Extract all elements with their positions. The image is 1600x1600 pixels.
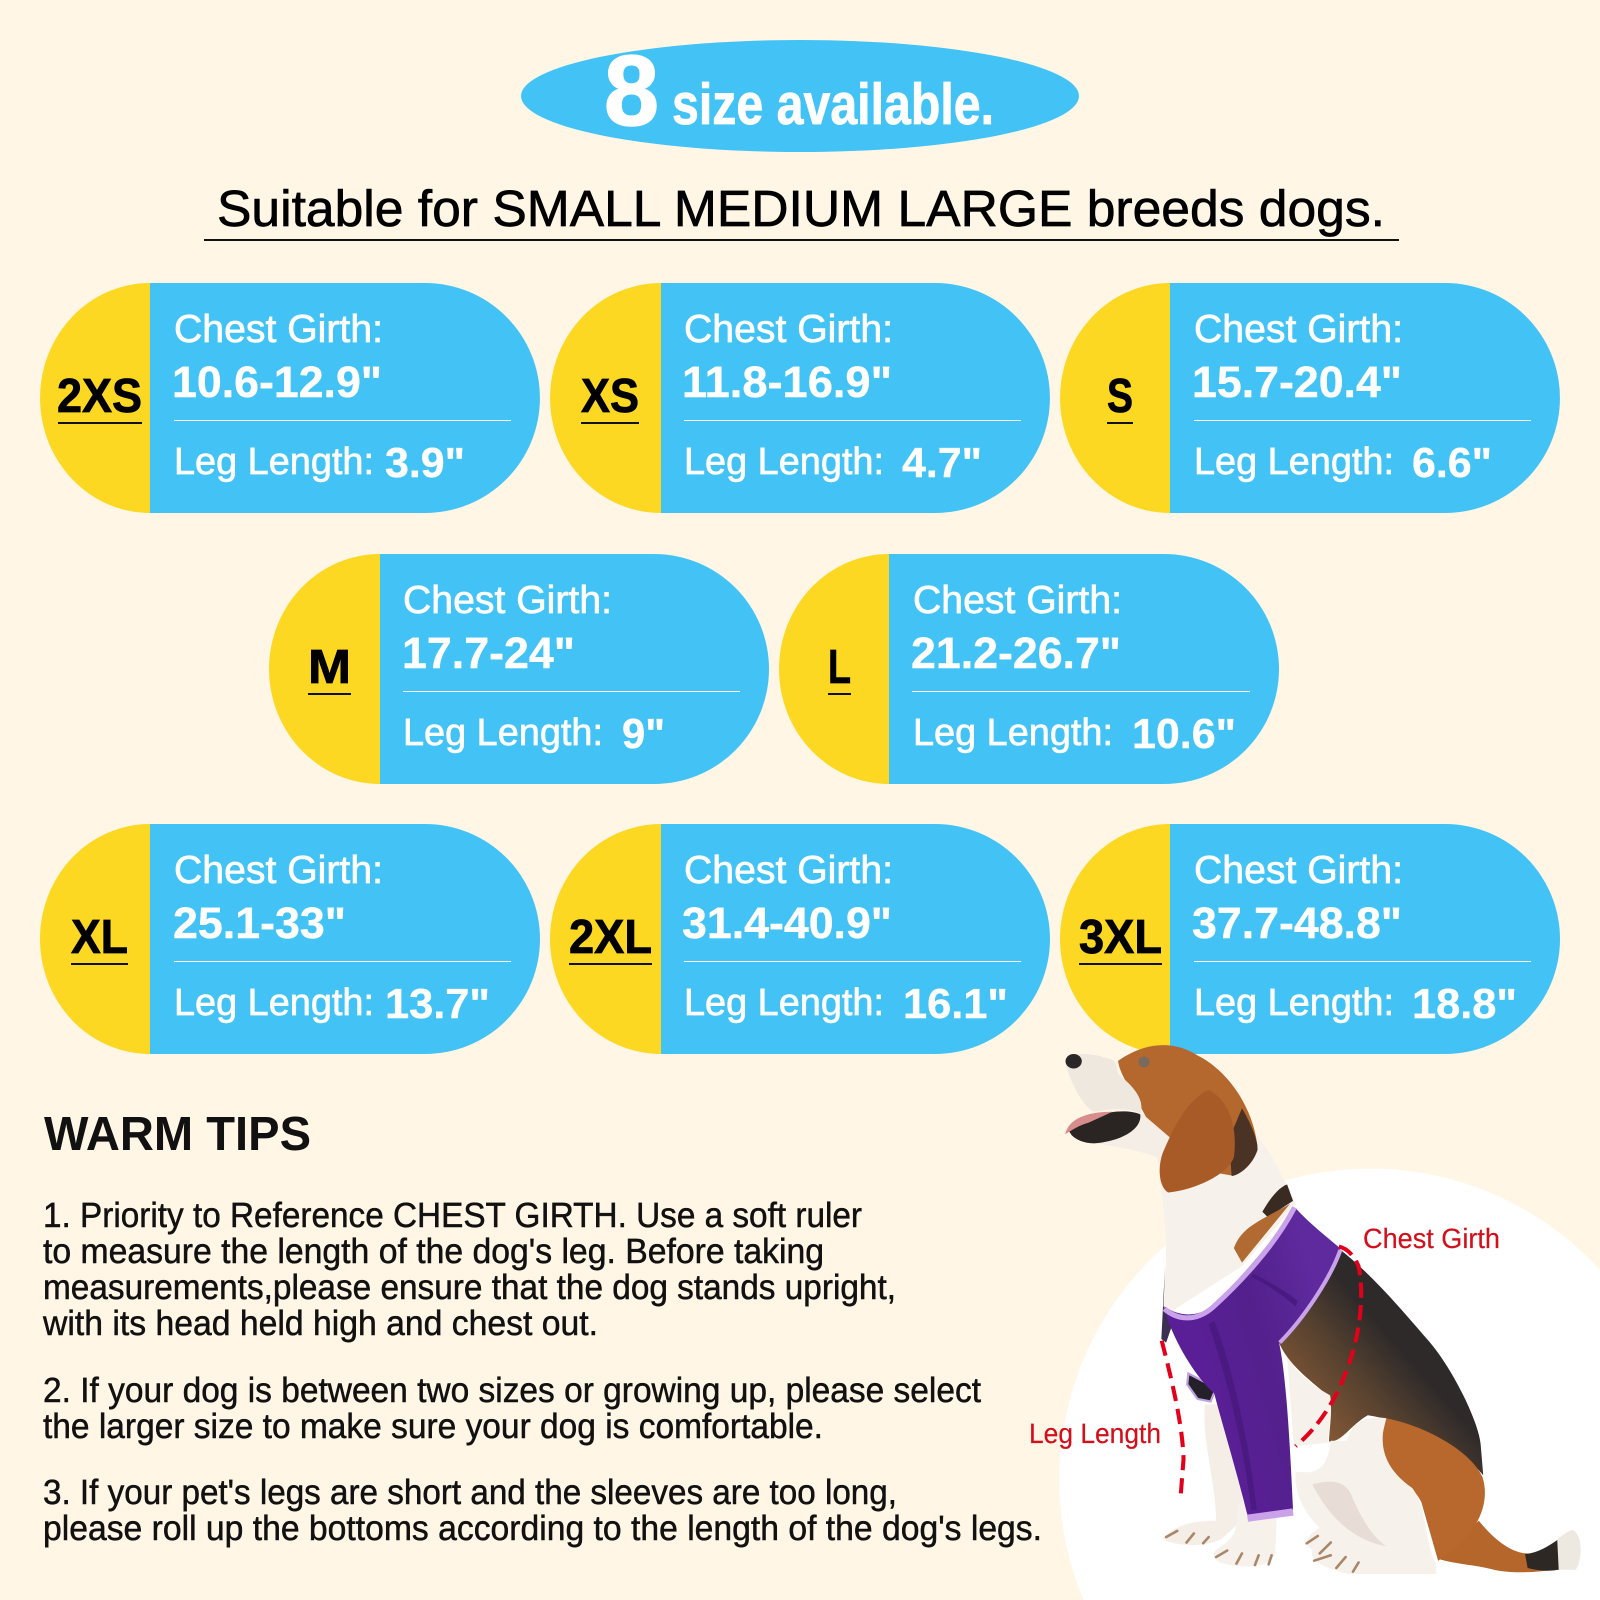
head brown (1118, 1045, 1258, 1175)
text block: tip 1: 1. Priority to Reference CHEST GIRTH. Use a soft ruler (43, 1196, 862, 1235)
ear (1160, 1090, 1235, 1192)
size card: S: 15.7-20.4" (1192, 358, 1402, 407)
text block: tip 1: measurements,please ensure that the dog stands upright, (43, 1268, 896, 1307)
size card: 2XS: Chest Girth: (174, 308, 383, 351)
size card: 2XL: Leg Length: (684, 982, 884, 1024)
leg length dashed line (1162, 1341, 1184, 1497)
size card: 2XS: Leg Length: (174, 441, 374, 483)
badge: 8 size available (521, 35, 1079, 152)
size card: 3XL (1060, 824, 1560, 1054)
size card: M: 17.7-24" (402, 629, 575, 678)
size card: 3XL: 37.7-48.8" (1192, 899, 1402, 948)
white neck and chest (1161, 1135, 1296, 1314)
size card: 2XL: 16.1" (903, 980, 1008, 1027)
size card: M: M (308, 641, 351, 694)
sleeve back sliver (1161, 1266, 1172, 1343)
white muzzle (1066, 1054, 1141, 1114)
chest tan patch (1234, 1204, 1290, 1263)
size card: 2XL: Chest Girth: (684, 849, 893, 892)
size card: M (269, 554, 769, 784)
size card: 3XL: 18.8" (1412, 980, 1517, 1027)
heading: warm tips: WARM TIPS (44, 1108, 311, 1161)
size card: 2XL: 31.4-40.9" (682, 899, 892, 948)
white thigh and hind paws (1295, 1418, 1436, 1574)
size card: M: 9" (622, 710, 665, 757)
badge: 8 size available: size available. (672, 72, 994, 137)
purple shirt (1164, 1208, 1340, 1515)
subtitle: suitable breeds: Suitable for SMALL MEDIUM LARGE breeds dogs. (217, 180, 1385, 237)
mouth (1068, 1111, 1140, 1143)
tongue (1065, 1112, 1112, 1134)
size card: S (1060, 283, 1560, 513)
size card: XL (40, 824, 540, 1054)
neck dark patch (1262, 1184, 1293, 1217)
label: leg length: Leg Length (1029, 1418, 1161, 1449)
shirt shading (1209, 1321, 1257, 1510)
dark back of head (1229, 1108, 1258, 1176)
size card: XL: 25.1-33" (173, 899, 346, 948)
size card: L: Chest Girth: (913, 579, 1122, 622)
size card: XS: XS (581, 370, 639, 423)
size card: 3XL: 3XL (1079, 911, 1162, 964)
white circle behind dog (1059, 1169, 1600, 1600)
size card: XL: 13.7" (385, 980, 490, 1027)
white belly (1287, 1357, 1331, 1446)
text block: tip 1: with its head held high and chest out. (42, 1304, 598, 1343)
text block: tip 3: please roll up the bottoms according to the length of the dog's legs. (43, 1509, 1042, 1548)
size card: L: 21.2-26.7" (911, 629, 1121, 678)
inner leg shadow (1312, 1482, 1386, 1546)
size card: XL: Chest Girth: (174, 849, 383, 892)
text block: tip 2: 2. If your dog is between two sizes or growing up, please select (43, 1371, 981, 1410)
size card: S: 6.6" (1412, 439, 1492, 486)
text block: tip 2 (43, 1371, 981, 1446)
size card: 2XL (550, 824, 1050, 1054)
text block: tip 3 (43, 1473, 1042, 1548)
size card: L: 10.6" (1132, 710, 1236, 757)
size card: XS: Leg Length: (684, 441, 884, 483)
eye (1138, 1057, 1150, 1067)
rear front leg (1162, 1404, 1246, 1545)
text block: tip 2: the larger size to make sure your dog is comfortable. (43, 1407, 823, 1446)
chest girth dashed line (1296, 1247, 1361, 1446)
label: chest girth: Chest Girth (1363, 1223, 1500, 1254)
size card: M: Leg Length: (403, 712, 603, 754)
nose (1066, 1054, 1082, 1069)
tail (1438, 1521, 1560, 1572)
size card: 2XL: 2XL (569, 911, 652, 964)
shirt trim (1164, 1207, 1295, 1318)
size card: S: S (1107, 370, 1133, 423)
paw toes (1166, 1531, 1359, 1572)
illustration: beagle wearing purple sleeve shirt (1065, 1045, 1581, 1574)
size card: L: Leg Length: (913, 712, 1113, 754)
text block: tip 1 (42, 1196, 896, 1343)
size card: 2XS (40, 283, 540, 513)
size card: M: Chest Girth: (403, 579, 612, 622)
size card: XS: Chest Girth: (684, 308, 893, 351)
size card: 3XL: Chest Girth: (1194, 849, 1403, 892)
size card: S: Leg Length: (1194, 441, 1394, 483)
harness strap (1187, 1374, 1216, 1401)
size card: L (779, 554, 1279, 784)
size card: L: L (828, 641, 851, 694)
badge: 8 size available: 8 (604, 35, 659, 147)
size card: XL: XL (71, 911, 128, 964)
size card: XS: 4.7" (902, 439, 982, 486)
text block: tip 3: 3. If your pet's legs are short and the sleeves are too long, (43, 1473, 897, 1512)
size card: S: Chest Girth: (1194, 308, 1403, 351)
size card: 2XS: 2XS (57, 370, 142, 423)
dark saddle with tan side (1279, 1248, 1483, 1475)
size card: XL: Leg Length: (174, 982, 374, 1024)
lower jaw (1074, 1114, 1172, 1186)
near front paw (1214, 1503, 1277, 1566)
size card: 2XS: 3.9" (385, 439, 465, 486)
size card: 2XS: 10.6-12.9" (172, 358, 382, 407)
brown haunch (1381, 1418, 1485, 1561)
size card: XS (550, 283, 1050, 513)
size card: 3XL: Leg Length: (1194, 982, 1394, 1024)
size card: XS: 11.8-16.9" (682, 358, 892, 407)
text block: tip 1: to measure the length of the dog's leg. Before taking (43, 1232, 824, 1271)
